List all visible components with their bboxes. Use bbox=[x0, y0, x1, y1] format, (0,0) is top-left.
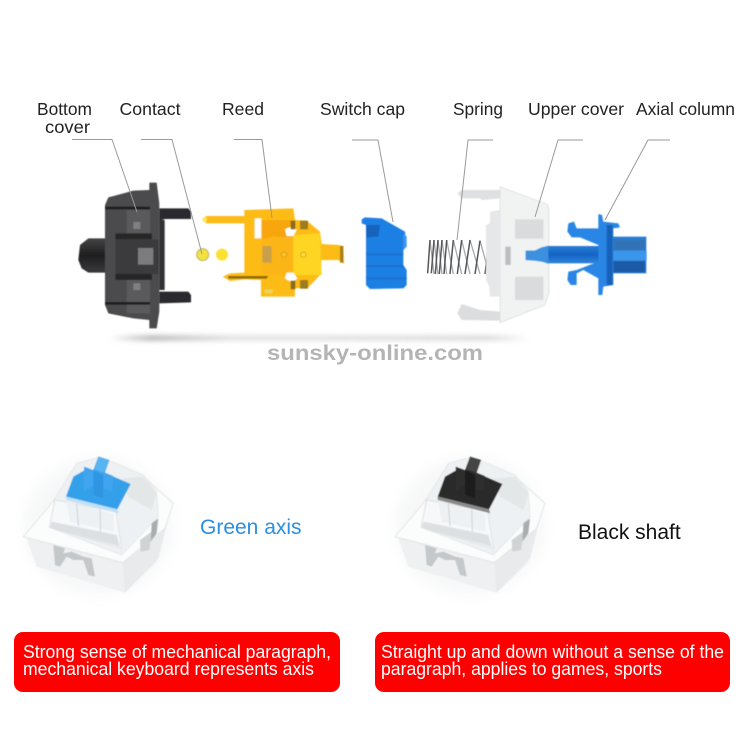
switch: blue bbox=[23, 457, 173, 595]
watermark: sunsky-online.com bbox=[267, 342, 483, 365]
label: Bottom cover: Bottom bbox=[37, 99, 92, 119]
label: Contact: Contact bbox=[120, 99, 181, 119]
part: axial column bbox=[526, 214, 647, 295]
label: Spring: Spring bbox=[453, 99, 503, 119]
callout: left: Strong sense of mechanical paragraph, bbox=[23, 642, 331, 662]
callout: left bbox=[14, 632, 340, 692]
callout: right bbox=[375, 632, 730, 692]
floor shadow bbox=[110, 335, 530, 341]
part: contact dots bbox=[197, 249, 228, 261]
callout: right: Straight up and down without a sense of the bbox=[381, 642, 724, 662]
label: Bottom cover: cover bbox=[45, 117, 90, 137]
label: Switch cap: Switch cap bbox=[320, 99, 405, 119]
part: reed bbox=[202, 208, 344, 297]
callout: left: mechanical keyboard represents axis bbox=[23, 659, 314, 679]
caption: Black shaft: Black shaft bbox=[578, 521, 681, 544]
part: switch cap bbox=[362, 217, 407, 289]
part: upper cover bbox=[457, 187, 549, 323]
switch: black bbox=[395, 457, 545, 595]
callout: right: paragraph, applies to games, sports bbox=[381, 659, 662, 679]
label: Axial column: Axial column bbox=[636, 99, 735, 119]
leader lines bbox=[72, 140, 670, 254]
part: bottom cover bbox=[78, 183, 191, 328]
label: Reed: Reed bbox=[222, 99, 264, 119]
part: spring bbox=[428, 240, 489, 275]
label: Upper cover: Upper cover bbox=[528, 99, 624, 119]
caption: Green axis: Green axis bbox=[200, 516, 302, 539]
label: Bottom cover bbox=[37, 99, 92, 137]
